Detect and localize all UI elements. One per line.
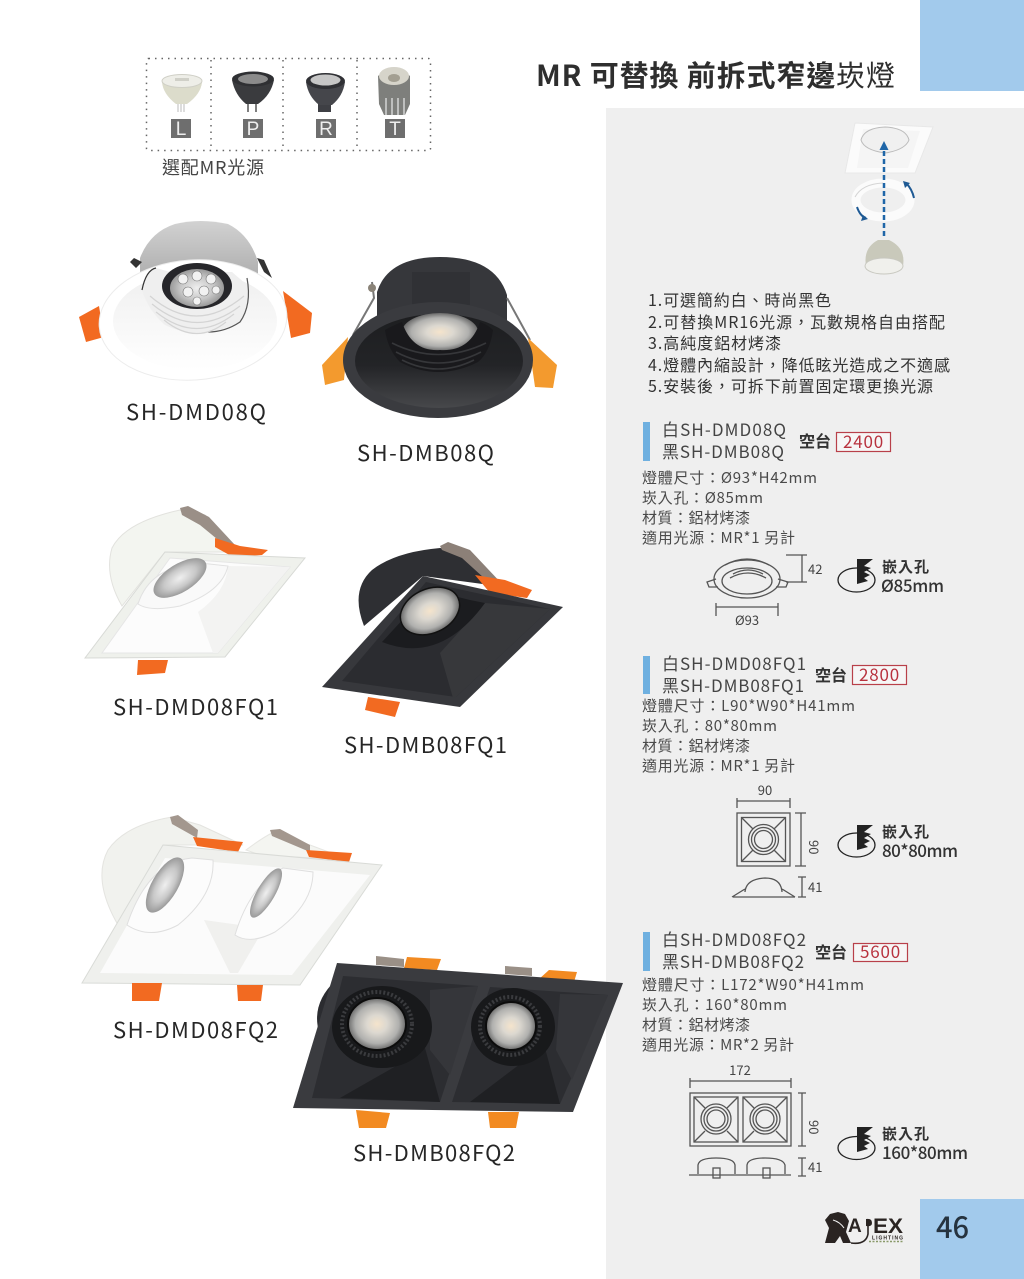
icon: bulb T: [378, 67, 410, 115]
dimension drawing: double square downlight: 172: [729, 1060, 751, 1079]
section: SH-DMD08Q specification: 適用光源：MR*1 另計: [642, 527, 795, 548]
text block: feature list: 3.高純度鋁材烤漆: [648, 330, 781, 354]
dotted frame: [146, 58, 430, 150]
label: SH-DMD08FQ1: SH-DMD08FQ1: [113, 690, 278, 722]
icon: recess hole symbol: [838, 825, 875, 857]
panel: MR light source options: [146, 58, 430, 180]
dimension drawing: double square downlight: 41: [808, 1157, 822, 1176]
section: SH-DMD08FQ1 specification: 黑SH-DMB08FQ1: [662, 672, 804, 697]
text: recess hole size: 160*80mm: [882, 1139, 968, 1164]
top-right blue tab: [920, 0, 1024, 91]
section: SH-DMD08Q specification: 黑SH-DMB08Q: [662, 438, 784, 463]
page number: 46: [936, 1205, 969, 1247]
badge P: [243, 119, 263, 140]
badge T: [385, 119, 405, 140]
section: SH-DMD08FQ1 specification: 材質：鋁材烤漆: [642, 735, 750, 756]
text block: feature list: [648, 287, 950, 397]
section: SH-DMD08FQ1 specification: [642, 650, 906, 776]
product: white square downlight double: [82, 815, 382, 1001]
bottom-right blue page tab: [920, 1199, 1024, 1279]
badge R: R: [319, 119, 333, 140]
label: SH-DMB08FQ2: SH-DMB08FQ2: [353, 1136, 515, 1168]
icon: bulb replacement installation diagram: [845, 123, 933, 274]
label: SH-DMD08FQ2: SH-DMD08FQ2: [113, 1013, 278, 1045]
dimension drawing: single square downlight: 90: [805, 840, 824, 854]
label: SH-DMB08FQ1: SH-DMB08FQ1: [344, 728, 507, 760]
text: recess hole size: 80*80mm: [882, 837, 958, 862]
text: recess hole size: [881, 556, 944, 597]
badge R: [316, 119, 336, 140]
product: black square downlight double: [293, 956, 623, 1128]
section: SH-DMD08Q specification: [642, 416, 890, 548]
section: SH-DMD08FQ2 specification: 崁入孔：160*80mm: [642, 994, 787, 1015]
section: SH-DMD08FQ2 specification: 5600: [860, 938, 901, 963]
product: white round downlight: [79, 221, 312, 386]
badge P: P: [247, 119, 259, 140]
logo: APEX Lighting: EX: [873, 1215, 903, 1238]
logo: APEX Lighting: A: [848, 1216, 862, 1237]
badge L: [171, 119, 191, 140]
text: recess hole size: 嵌入孔: [882, 556, 929, 577]
section: SH-DMD08FQ2 specification: [642, 926, 908, 1055]
dimension drawing: single square downlight: 90: [758, 780, 772, 799]
text block: feature list: 1.可選簡約白、時尚黑色: [648, 287, 831, 311]
section: SH-DMD08Q specification: 空台: [799, 428, 831, 452]
badge T: T: [389, 119, 401, 140]
section: SH-DMD08FQ2 specification: 空台: [815, 939, 847, 963]
icon: bulb L: [162, 74, 202, 112]
dimension drawing: double square downlight: [689, 1060, 824, 1178]
icon: recess hole symbol: [838, 559, 875, 592]
section: SH-DMD08FQ2 specification: 白SH-DMD08FQ2: [662, 926, 806, 951]
section: SH-DMD08Q specification: 白SH-DMD08Q: [662, 416, 786, 441]
dimension drawing: double square downlight: 90: [805, 1120, 824, 1134]
caption: 選配MR光源: [162, 154, 264, 180]
dimension drawing: round downlight: [707, 555, 822, 629]
dimension drawing: single square downlight: [732, 780, 824, 897]
text: recess hole size: [882, 1123, 968, 1164]
text block: feature list: 5.安裝後，可拆下前置固定環更換光源: [648, 373, 933, 397]
section: SH-DMD08FQ1 specification: 2800: [859, 661, 900, 686]
text block: feature list: 4.燈體內縮設計，降低眩光造成之不適感: [648, 352, 950, 376]
logo: APEX Lighting: [825, 1212, 903, 1243]
section: SH-DMD08FQ1 specification: 燈體尺寸：L90*W90*H41mm: [642, 695, 855, 716]
title: MR 可替換 前拆式窄邊崁燈: [536, 53, 895, 95]
section: SH-DMD08Q specification: 2400: [843, 428, 884, 453]
text: recess hole size: 嵌入孔: [882, 821, 929, 842]
product: black round downlight: [322, 257, 557, 418]
icon: bulb P: [232, 72, 274, 112]
text: recess hole size: Ø85mm: [881, 572, 944, 597]
section: SH-DMD08Q specification: 崁入孔：Ø85mm: [642, 487, 763, 508]
label: SH-DMB08Q: SH-DMB08Q: [357, 436, 494, 468]
section: SH-DMD08FQ1 specification: 白SH-DMD08FQ1: [662, 650, 806, 675]
panel: grey specification column: [606, 108, 1024, 1279]
section: SH-DMD08FQ2 specification: 燈體尺寸：L172*W90*H41mm: [642, 974, 864, 995]
logo: APEX Lighting: LIGHTING: [872, 1236, 903, 1242]
icon: recess hole symbol: [838, 1127, 875, 1160]
section: SH-DMD08FQ2 specification: 黑SH-DMB08FQ2: [662, 948, 804, 973]
text: recess hole size: [882, 821, 958, 862]
section: SH-DMD08FQ1 specification: 崁入孔：80*80mm: [642, 715, 777, 736]
badge L: L: [176, 119, 186, 140]
product: black square downlight single: [322, 542, 563, 717]
section: SH-DMD08FQ1 specification: 適用光源：MR*1 另計: [642, 755, 795, 776]
section: SH-DMD08FQ2 specification: 材質：鋁材烤漆: [642, 1014, 750, 1035]
section: SH-DMD08FQ2 specification: 適用光源：MR*2 另計: [642, 1034, 794, 1055]
dimension drawing: round downlight: 42: [808, 559, 822, 578]
label: SH-DMD08Q: SH-DMD08Q: [126, 395, 266, 427]
text: recess hole size: 嵌入孔: [882, 1123, 929, 1144]
icon: bulb R: [306, 73, 345, 112]
dimension drawing: single square downlight: 41: [808, 877, 822, 896]
section: SH-DMD08FQ1 specification: 空台: [815, 662, 847, 686]
text block: feature list: 2.可替換MR16光源，瓦數規格自由搭配: [648, 309, 945, 333]
dimension drawing: round downlight: Ø93: [735, 610, 759, 629]
product: white square downlight single: [85, 506, 305, 675]
section: SH-DMD08Q specification: 燈體尺寸：Ø93*H42mm: [642, 467, 817, 488]
section: SH-DMD08Q specification: 材質：鋁材烤漆: [642, 507, 750, 528]
